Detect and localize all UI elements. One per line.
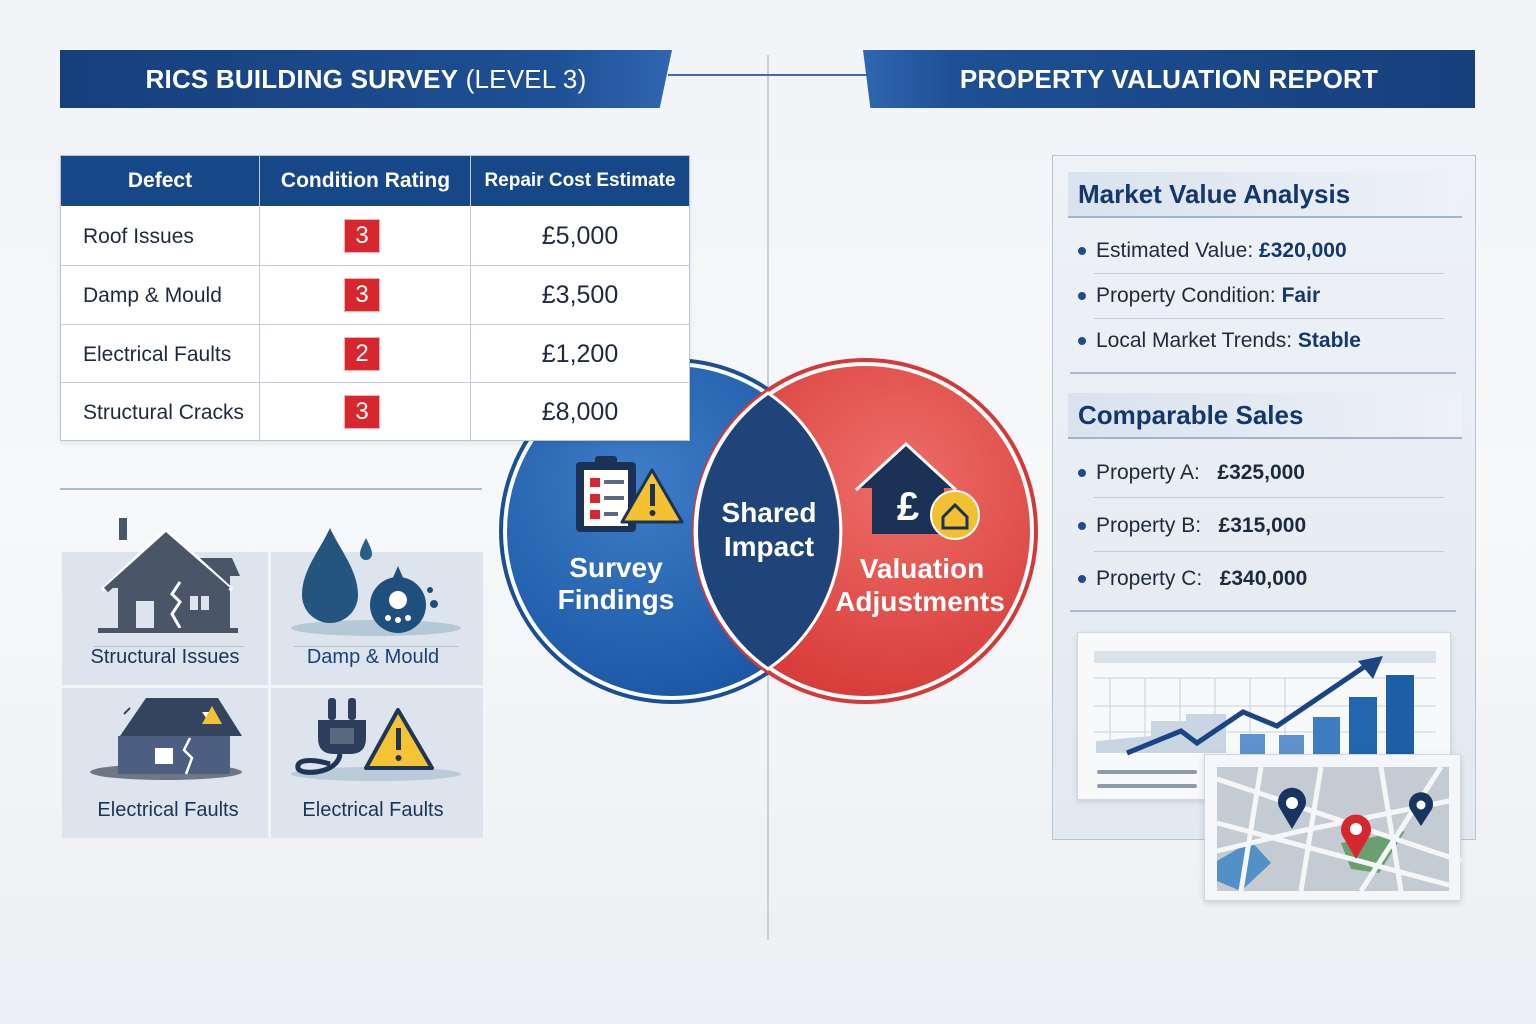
icon: house pound: £ bbox=[897, 485, 919, 529]
row: damp: Damp & Mould bbox=[83, 284, 222, 307]
row: structural bbox=[83, 395, 618, 429]
right banner bbox=[863, 50, 1475, 108]
venn diagram: Adjustments bbox=[835, 586, 1005, 617]
left banner: RICS BUILDING SURVEY bbox=[146, 64, 458, 94]
market value heading: Market Value Analysis bbox=[1078, 178, 1350, 208]
icon: damp & mould bbox=[291, 528, 461, 668]
table header: Condition Rating bbox=[281, 169, 450, 192]
survey findings label: Survey bbox=[569, 552, 663, 583]
icon grid bbox=[62, 552, 483, 838]
row: damp: 3 bbox=[355, 281, 369, 308]
row: structural: Structural Cracks bbox=[83, 401, 244, 424]
venn diagram: Findings bbox=[558, 584, 674, 615]
row: structural: £8,000 bbox=[542, 398, 618, 426]
row: electrical: Electrical Faults bbox=[83, 343, 231, 366]
vertical divider bbox=[767, 55, 769, 940]
icon: house pound bbox=[856, 444, 979, 539]
row: electrical bbox=[83, 337, 618, 371]
table header: Repair Cost Estimate bbox=[484, 170, 676, 191]
comparable sales heading: Comparable Sales bbox=[1078, 400, 1303, 430]
row: electrical: 2 bbox=[355, 340, 369, 367]
comparable sales bullets bbox=[1070, 461, 1456, 612]
valuation adjustments label: Valuation bbox=[860, 553, 984, 584]
comparable sales heading bbox=[1068, 393, 1462, 439]
row: electrical: £1,200 bbox=[542, 340, 618, 368]
row: roof: Roof Issues bbox=[83, 225, 194, 248]
market value heading bbox=[1068, 172, 1462, 218]
icon: structural issues: Structural Issues bbox=[91, 646, 239, 668]
left banner bbox=[60, 50, 672, 108]
icon: electrical faults house bbox=[90, 698, 242, 821]
table header bbox=[61, 156, 689, 206]
defects table bbox=[60, 155, 690, 441]
market value bullets: Local Market Trends: Stable bbox=[1096, 329, 1361, 352]
row: roof: 3 bbox=[355, 222, 369, 249]
left banner: (LEVEL 3) bbox=[466, 64, 586, 94]
row: roof bbox=[83, 219, 618, 253]
row: roof: £5,000 bbox=[542, 222, 618, 250]
icon: structural issues bbox=[91, 518, 244, 668]
right banner: PROPERTY VALUATION REPORT bbox=[960, 64, 1378, 94]
row: structural: 3 bbox=[355, 398, 369, 425]
row: damp bbox=[83, 278, 618, 312]
right panel bbox=[1052, 155, 1476, 840]
icon: electrical plug: Electrical Faults bbox=[302, 799, 444, 821]
icon: electrical faults house: Electrical Faults bbox=[97, 799, 239, 821]
market value bullets bbox=[1070, 239, 1456, 374]
connector line bbox=[668, 74, 868, 76]
icon: clipboard warning bbox=[576, 456, 682, 532]
shared impact label: Shared bbox=[722, 497, 816, 528]
market value bullets: Estimated Value: £320,000 bbox=[1096, 239, 1347, 262]
table header: Defect bbox=[128, 169, 192, 192]
chart card bbox=[1077, 632, 1451, 800]
venn diagram bbox=[499, 358, 1038, 704]
icon: electrical plug bbox=[291, 698, 461, 821]
comparable sales bullets: Property B: £315,000 bbox=[1096, 514, 1306, 537]
map card bbox=[1204, 754, 1461, 901]
comparable sales bullets: Property A: £325,000 bbox=[1096, 461, 1305, 484]
icon: damp & mould: Damp & Mould bbox=[307, 646, 439, 668]
venn diagram: Impact bbox=[724, 531, 814, 562]
comparable sales bullets: Property C: £340,000 bbox=[1096, 567, 1307, 590]
row: damp: £3,500 bbox=[542, 281, 618, 309]
market value bullets: Property Condition: Fair bbox=[1096, 284, 1320, 307]
